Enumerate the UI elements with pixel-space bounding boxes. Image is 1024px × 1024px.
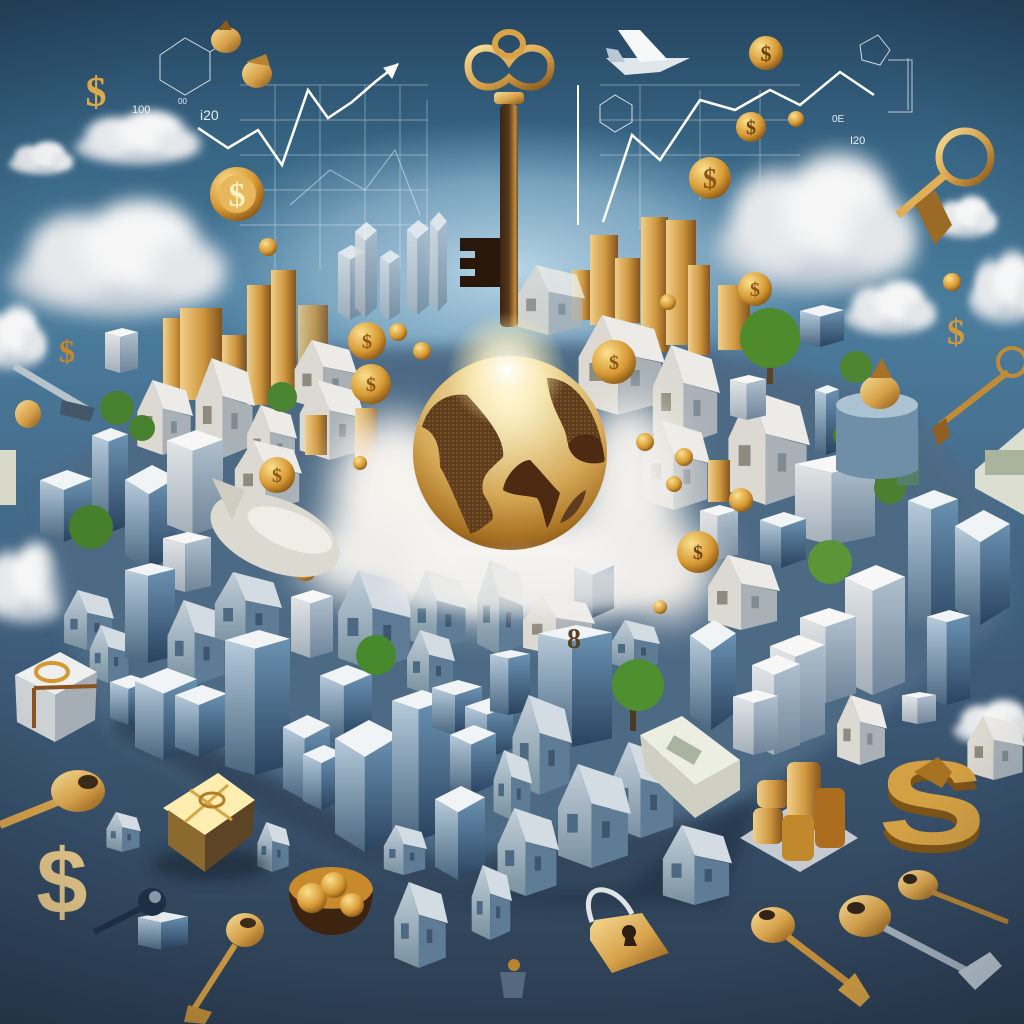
- top right gold key: [898, 131, 991, 245]
- left chart labels: 00: [178, 97, 187, 106]
- trees: [69, 308, 919, 731]
- floating dollar signs: $: [59, 333, 75, 369]
- fog over the middle row: [390, 555, 670, 615]
- large coins: $: [746, 117, 756, 139]
- right chart labels: [832, 114, 865, 147]
- left silver key: [14, 366, 95, 422]
- right chart labels: I20: [850, 135, 865, 147]
- small coins around the city: $: [366, 374, 376, 396]
- houses upper right district: [518, 265, 875, 568]
- bottom right keys: [751, 870, 1008, 1007]
- right line chart: [578, 35, 912, 230]
- left chart labels: i20: [200, 107, 219, 123]
- continents: [422, 378, 605, 533]
- small coins around the city: [259, 272, 772, 639]
- key top loop: [495, 32, 523, 56]
- key collar: [494, 92, 524, 104]
- key two: [839, 895, 1002, 990]
- houses upper left district: [40, 328, 377, 592]
- central key: [460, 32, 551, 327]
- small coins around the city: $: [693, 542, 703, 564]
- left chart labels: [132, 97, 219, 123]
- large coins: $: [228, 177, 246, 214]
- small coins around the city: $: [272, 465, 282, 487]
- large coins: $: [760, 41, 772, 66]
- gold gift box: [150, 773, 270, 881]
- small coins around the city: $: [750, 279, 760, 301]
- right chart labels: 0E: [832, 114, 845, 125]
- large gold dollar sign: S: [878, 736, 986, 870]
- icon: paper plane: [606, 30, 690, 75]
- front block cluster: [106, 625, 1024, 968]
- small bag bottom: [500, 959, 526, 998]
- white airship: [198, 476, 352, 594]
- slate base under the city: [40, 340, 1010, 890]
- left line chart: [160, 38, 428, 275]
- right edge gold key: [932, 348, 1024, 446]
- fog around the globe: [300, 400, 715, 620]
- floating dollar signs: $: [86, 70, 106, 116]
- pale distant towers: [338, 212, 447, 320]
- contact shadow along the city front: [110, 700, 760, 905]
- small money bag left: [15, 400, 41, 428]
- bowl of coins: [289, 867, 373, 935]
- bottom left gold key: [0, 770, 105, 825]
- key shaft: [500, 104, 518, 327]
- golden skyline left: [163, 270, 328, 405]
- gift box left: [15, 652, 97, 742]
- coin stacks on tray: [740, 762, 858, 872]
- bottom key long: [184, 913, 264, 1024]
- padlock: [588, 890, 669, 973]
- banknote stacks: [0, 428, 1024, 818]
- large coins: [210, 36, 961, 291]
- globe: [413, 356, 607, 550]
- key bit: [460, 238, 500, 287]
- icon: money bags top: [211, 20, 272, 88]
- large gold dollar sign: S: [878, 744, 986, 878]
- burst of light: [447, 312, 567, 428]
- clouds: [0, 110, 1024, 745]
- key bow: [468, 48, 551, 87]
- right tower row: [733, 490, 1010, 765]
- floating dollar signs: $: [947, 312, 965, 352]
- large coins: $: [703, 164, 717, 195]
- left gold dollar sign: $: [36, 831, 88, 933]
- key three: [898, 870, 1008, 922]
- drum with money bag: [836, 358, 918, 479]
- left chart labels: 100: [132, 104, 150, 116]
- small coins around the city: $: [609, 352, 619, 374]
- floating dollar signs: [59, 70, 965, 369]
- golden skyline right: [572, 217, 750, 355]
- middle row houses: [64, 555, 780, 730]
- small coins around the city: $: [362, 331, 372, 353]
- key one: [751, 907, 870, 1007]
- small keyhole finial: 8: [567, 624, 581, 655]
- pale sky glow behind the skyline: [180, 120, 840, 420]
- dark small key: [94, 888, 166, 932]
